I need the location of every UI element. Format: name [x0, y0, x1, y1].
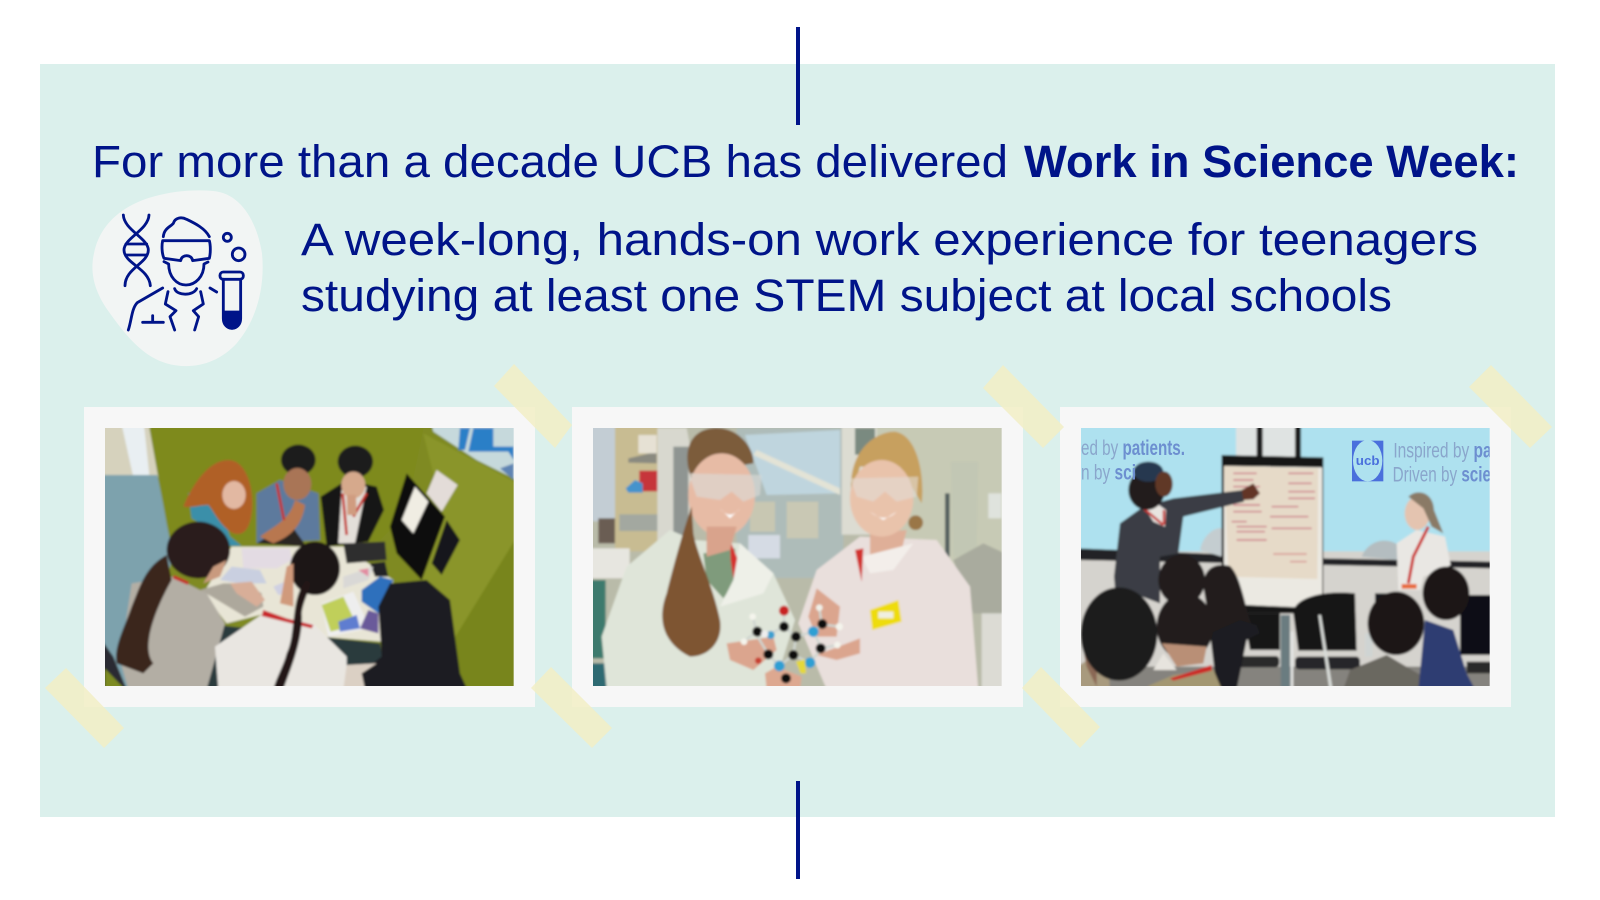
- photo: students around a table in a green booth: [102, 425, 517, 689]
- tape: card 3 top right: [1469, 365, 1552, 448]
- tape: between cards 1 and 2: [531, 667, 612, 748]
- photo card 1: [84, 407, 535, 707]
- bottom vertical line: [796, 781, 800, 879]
- description text: A week-long, hands-on work experience for teenagers: [301, 214, 1478, 265]
- description text: studying at least one STEM subject at local schools: [301, 270, 1392, 321]
- photo card 2: [572, 407, 1023, 707]
- screen slogan text: n by sci: [1081, 460, 1136, 484]
- photo: students presenting at a flipchart: [1078, 425, 1493, 690]
- icon line art: [123, 215, 245, 330]
- tape: card 1 top right: [494, 364, 572, 448]
- screen slogan text: ed by patients.: [1081, 436, 1185, 460]
- screen slogan text: [1081, 436, 1492, 487]
- photo card 3: [1060, 407, 1511, 707]
- card frame: [572, 407, 1023, 707]
- description text: [301, 214, 1478, 321]
- screen slogan text: Inspired by pa: [1393, 438, 1492, 462]
- top vertical line: [796, 27, 800, 125]
- card frame: [1060, 407, 1511, 707]
- heading: [92, 136, 1519, 187]
- UCB logo: ucb: [1356, 453, 1380, 468]
- heading: Work in Science Week:: [1024, 136, 1519, 187]
- card frame: [84, 407, 535, 707]
- icon background blob: [92, 190, 263, 366]
- screen slogan text: Driven by scie: [1393, 463, 1491, 487]
- icon: scientist with DNA and test tube: [92, 190, 263, 366]
- UCB logo: [1352, 440, 1383, 481]
- background panel: [40, 64, 1555, 817]
- photo: two students with molecule model in a lab: [590, 425, 1005, 690]
- tape: card 1 bottom left: [45, 668, 124, 748]
- tape: card 2 top right: [983, 365, 1064, 448]
- heading: For more than a decade UCB has delivered: [92, 136, 1008, 187]
- decorative tape strips: [45, 364, 1552, 748]
- tape: between cards 2 and 3: [1022, 667, 1100, 748]
- test tube liquid: [223, 311, 241, 330]
